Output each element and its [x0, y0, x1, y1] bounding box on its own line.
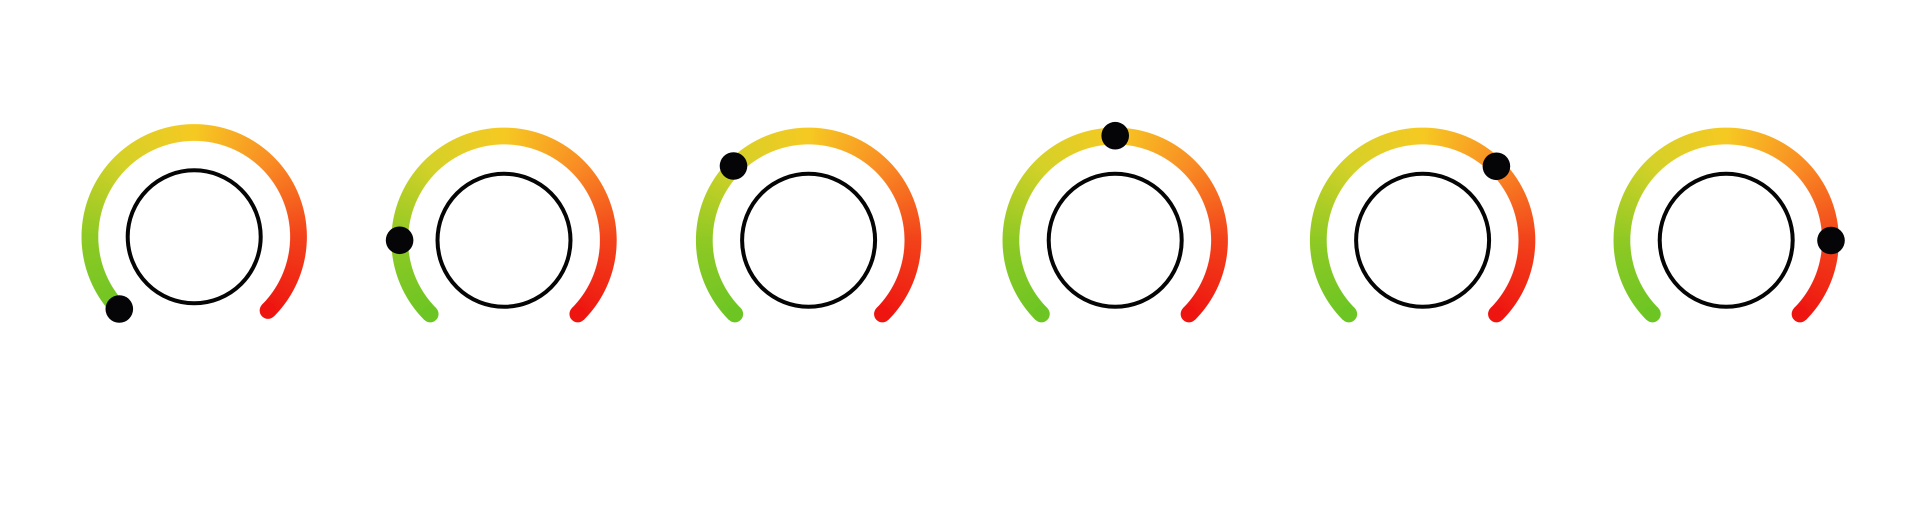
gauge 2: low position: [386, 128, 617, 322]
gauge 3: lower-mid position: [696, 128, 922, 322]
gauge 1 markers: [106, 168, 275, 323]
gradient arc 1: [82, 124, 307, 316]
inner ring 5: [1356, 174, 1489, 307]
gauge 6 markers: [1646, 172, 1845, 322]
arc start cap 4: [1033, 306, 1050, 322]
arc start cap 5: [1341, 306, 1357, 322]
arc start cap 2: [422, 306, 439, 322]
inner ring 4: [1049, 174, 1182, 307]
gradient arc 5: [1310, 128, 1536, 320]
gradient arc 3: [696, 128, 922, 320]
gradient arc 2: [392, 128, 617, 320]
arc end cap 5: [1488, 306, 1505, 322]
inner ring 6: [1660, 174, 1793, 307]
gauge 1: minimum position: [82, 124, 307, 323]
gauge 5: upper-mid position: [1310, 128, 1536, 322]
indicator dot 1: [106, 295, 133, 323]
inner ring 3: [742, 174, 875, 307]
indicator dot 2: [386, 226, 413, 254]
arc start cap 3: [727, 306, 743, 322]
indicator dot 6: [1817, 227, 1845, 254]
gauge 3 markers: [720, 152, 890, 322]
arc end cap 4: [1181, 306, 1197, 322]
indicator dot 5: [1483, 152, 1510, 180]
arc end cap 2: [569, 306, 586, 322]
gradient arc 4: [1002, 128, 1228, 320]
gauge 4 markers: [1035, 122, 1196, 322]
indicator dot 4: [1101, 122, 1129, 150]
arc end cap 1: [260, 302, 276, 319]
indicator dot 3: [720, 152, 747, 180]
gradient arc 6: [1614, 128, 1838, 320]
inner ring 1: [128, 170, 261, 303]
gauge 2 markers: [386, 172, 585, 322]
arc end cap 3: [874, 306, 891, 322]
arc start cap 6: [1644, 306, 1661, 322]
inner ring 2: [438, 174, 570, 307]
gauge 5 markers: [1342, 152, 1510, 322]
arc start cap 1: [112, 302, 129, 319]
gauge 4: middle position: [1002, 122, 1228, 322]
arc end cap 6: [1792, 306, 1808, 322]
gauge 6: high position: [1614, 128, 1845, 322]
